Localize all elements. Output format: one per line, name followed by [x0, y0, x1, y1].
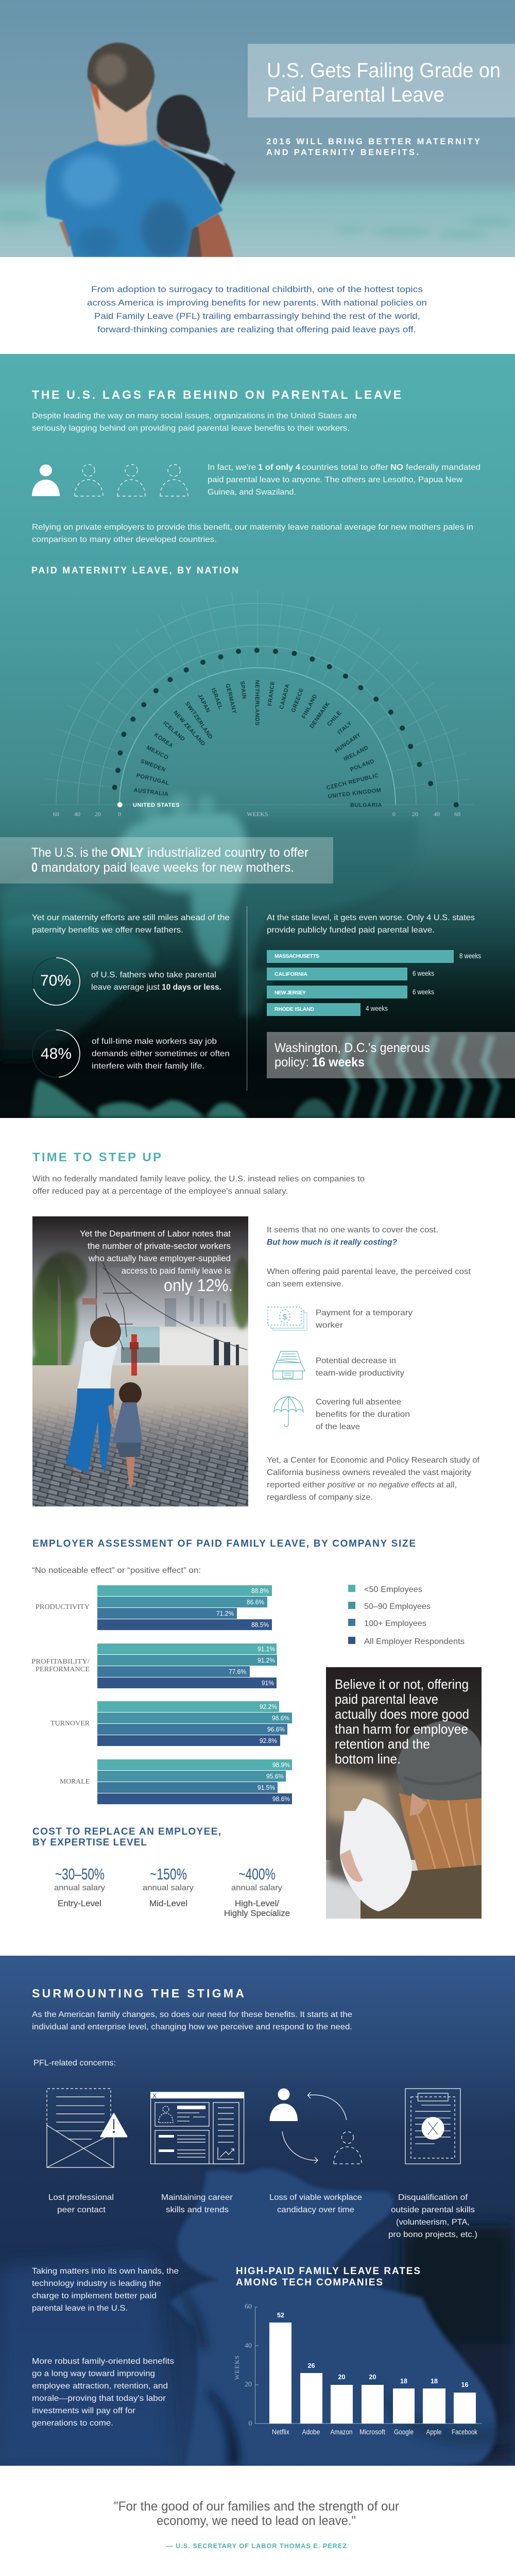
- callout: US is the only country: 0: [31, 860, 38, 875]
- bar group: profitability: [31, 1643, 277, 1688]
- bar chart: state paid leave: [267, 950, 481, 1016]
- text: 1 of only 4 countries: 1 of only 4: [258, 463, 300, 472]
- heading: cost to replace: BY EXPERTISE LEVEL: [32, 1837, 147, 1848]
- text: payment for temporary worker: Payment for a temporary: [316, 1309, 413, 1317]
- panel background: teal section with baby feet photo: [0, 354, 515, 1118]
- bar group: productivity: PRODUCTIVITY: [36, 1603, 90, 1611]
- text: covering absentee benefits: benefits for the duration: [316, 1410, 410, 1419]
- text: maternity ahead of paternity: [32, 913, 230, 935]
- callout: US is the only country: [0, 837, 333, 884]
- caption: lost professional peer contact: Lost professional: [48, 2193, 114, 2202]
- icon: resume window: X: [152, 2092, 157, 2099]
- bar group: turnover: 96.6%: [267, 1725, 285, 1733]
- quote: [114, 2499, 399, 2528]
- text: productivity decrease: team-wide productivity: [316, 1369, 404, 1378]
- callout: Washington DC: Washington, D.C.'s generous: [274, 1041, 430, 1055]
- stat: high-level: annual salary: [231, 1884, 282, 1892]
- stat: 48%: demands either sometimes or often: [92, 1049, 230, 1058]
- bar chart: tech company leave: 52: [277, 2311, 284, 2319]
- paragraph: family-oriented benefits: generations to come.: [32, 2419, 113, 2428]
- icon: money: [268, 1307, 307, 1330]
- bar chart: state paid leave: 4 weeks: [366, 1004, 388, 1012]
- bar group: morale: 98.9%: [272, 1761, 290, 1769]
- stat: 70%: leave average just: [91, 983, 160, 992]
- radial chart: paid maternity leave by nation: FRANCE: [267, 681, 276, 706]
- bar chart: tech company leave: WEEKS: [233, 2355, 241, 2380]
- radial chart: paid maternity leave by nation: CHILE: [326, 710, 343, 727]
- text: maternity ahead of paternity: paternity benefits we offer new fathers.: [32, 926, 183, 935]
- paragraph: CEPR study: positive: [327, 1481, 355, 1489]
- stat: 70%: 10 days or less.: [162, 983, 221, 992]
- heading: employer assessment: EMPLOYER ASSESSMENT OF PAID FAMILY LEAVE, BY COMPANY SIZE: [32, 1538, 416, 1549]
- bar chart: tech company leave: Netflix: [272, 2428, 289, 2436]
- callout: US is the only country: mandatory paid leave weeks for new mothers.: [41, 860, 294, 875]
- radial chart: paid maternity leave by nation: SWEDEN: [140, 758, 166, 773]
- bar chart: tech company leave: Google: [394, 2428, 414, 2436]
- quote: economy, we need to lead on leave.": [157, 2514, 356, 2528]
- bar group: profitability: PERFORMANCE: [36, 1665, 90, 1673]
- bar chart: tech company leave: 0: [248, 2420, 252, 2428]
- radial chart: paid maternity leave by nation: SWITZERLAND: [184, 701, 214, 740]
- text: payment for temporary worker: [315, 1309, 413, 1330]
- radial chart: paid maternity leave by nation: UNITED KINGDOM: [328, 787, 382, 800]
- text: state level: provide publicly funded paid parental leave.: [267, 926, 435, 935]
- caption: loss of candidacy: Loss of viable workplace: [269, 2193, 362, 2202]
- radial chart: paid maternity leave by nation: BULGARIA: [350, 802, 382, 808]
- caption: disqualification: [388, 2193, 477, 2239]
- stat: 70%: [32, 958, 221, 1005]
- stat: mid-level: annual salary: [143, 1884, 194, 1892]
- stat: 70%: of U.S. fathers who take parental: [91, 971, 216, 979]
- radial chart: paid maternity leave by nation: 0: [118, 810, 121, 818]
- paragraph: American family changes: individual and enterprise level, changing how we perceive and respond to the need.: [32, 2023, 352, 2031]
- stat: 48%: interfere with their family life.: [92, 1062, 204, 1071]
- radial chart: paid maternity leave by nation: 60: [454, 810, 460, 818]
- heading: cost to replace: COST TO REPLACE AN EMPLOYEE,: [32, 1826, 221, 1837]
- quote: "For the good of our families and the strength of our: [114, 2499, 399, 2514]
- caption: maintaining career skills: [161, 2193, 233, 2214]
- caption: disqualification: outside parental skills: [391, 2206, 475, 2214]
- paragraph: no federal policy: With no federally mandated family leave policy, the U.S. instead relies on companies to: [32, 1175, 365, 1183]
- radial chart: paid maternity leave by nation: NETHERLANDS: [254, 680, 260, 726]
- radial chart: paid maternity leave by nation: JAPAN: [196, 693, 211, 714]
- intro paragraph: forward-thinking companies are realizing that offering paid leave pays off.: [97, 325, 416, 334]
- bar group: profitability: 91.2%: [258, 1656, 275, 1664]
- legend: All Employer Respondents: [364, 1637, 465, 1646]
- text: cover the cost: [267, 1226, 438, 1247]
- caption: maintaining career skills: skills and trends: [166, 2206, 229, 2214]
- heading: THE U.S. LAGS FAR BEHIND ON PARENTAL LEAVE: [32, 388, 401, 401]
- photo panel: mother with baby: Believe it or not, offering: [335, 1676, 469, 1692]
- radial chart: paid maternity leave by nation: NEW ZEALAND: [172, 710, 207, 747]
- paragraph: family-oriented benefits: investments will pay off for: [32, 2406, 136, 2415]
- paragraph: CEPR study: no negative effects: [368, 1481, 435, 1489]
- bar group: morale: [60, 1759, 292, 1804]
- caption: loss of candidacy: [269, 2193, 362, 2214]
- text: cover the cost: It seems that no one wants to cover the cost.: [267, 1226, 438, 1234]
- callout: US is the only country: ONLY: [111, 845, 144, 860]
- radial chart: paid maternity leave by nation: GERMANY: [224, 683, 237, 715]
- paragraph: family-oriented benefits: More robust family-oriented benefits: [32, 2357, 174, 2366]
- callout: Washington DC: [267, 1032, 515, 1078]
- callout: Washington DC: policy:: [274, 1055, 309, 1070]
- lead paragraph: Despite leading the way on many social issues, organizations in the United States are: [32, 412, 357, 420]
- divider line: [247, 906, 248, 1091]
- text: 1 of only 4 countries: federally mandated: [406, 463, 480, 472]
- photo panel: mother and child on cobblestone street: Yet the Department of Labor notes that: [80, 1229, 231, 1239]
- bar group: turnover: [50, 1701, 292, 1746]
- text: relying on private employers: [32, 523, 473, 544]
- paragraph: CEPR study: Yet, a Center for Economic and Policy Research study of: [267, 1456, 480, 1465]
- bar chart: tech company leave: 16: [461, 2381, 469, 2388]
- paragraph: family-oriented benefits: go a long way toward improving: [32, 2369, 155, 2378]
- legend: 50–90 Employees: [364, 1602, 431, 1611]
- bar chart: tech company leave: Adobe: [302, 2428, 320, 2436]
- icon: disqualified document: [405, 2089, 460, 2164]
- bar chart: tech company leave: Microsoft: [359, 2428, 385, 2436]
- radial chart: paid maternity leave by nation: POLAND: [349, 758, 375, 773]
- bar chart: tech company leave: 18: [400, 2377, 407, 2385]
- photo panel: mother and child on cobblestone street: access to paid family leave is: [122, 1266, 231, 1276]
- paragraph: American family changes: [32, 2010, 352, 2031]
- text: PFL-related concerns: PFL-related concerns:: [33, 2059, 116, 2067]
- cost stats by expertise level: [54, 1865, 290, 1918]
- text: state level: At the state level, it gets even worse. Only 4 U.S. states: [267, 913, 475, 922]
- radial chart: paid maternity leave by nation: FINLAND: [301, 693, 319, 720]
- callout: Washington DC: 16 weeks: [312, 1055, 365, 1070]
- paragraph: family-oriented benefits: [32, 2357, 174, 2428]
- radial chart: paid maternity leave by nation: 40: [74, 810, 80, 818]
- paragraph: CEPR study: at all,: [437, 1481, 457, 1489]
- radial chart: paid maternity leave by nation: HUNGARY: [334, 732, 362, 754]
- radial chart: paid maternity leave by nation: WEEKS: [247, 810, 268, 818]
- bar group: profitability: 91%: [262, 1679, 274, 1687]
- icon: money: $: [283, 1313, 287, 1321]
- heading: time to step up: TIME TO STEP UP: [32, 1150, 161, 1164]
- text: covering absentee benefits: Covering full absentee: [316, 1398, 401, 1406]
- text: 1 of only 4 countries: Guinea, and Swaziland.: [208, 488, 296, 497]
- text: perceived cost: When offering paid parental leave, the perceived cost: [267, 1267, 471, 1276]
- photo panel: mother with baby: actually does more good: [335, 1706, 469, 1722]
- text: 1 of only 4 countries: paid parental leave to anyone. The others are Lesotho, Papua New: [208, 476, 462, 484]
- radial chart: paid maternity leave by nation: KOREA: [153, 732, 174, 749]
- radial chart: paid maternity leave by nation: UNITED STATES: [133, 802, 180, 808]
- bar group: productivity: 88.8%: [251, 1587, 269, 1595]
- radial chart: paid maternity leave by nation: GREECE: [290, 687, 305, 713]
- icon: envelope with warning: [47, 2089, 127, 2167]
- bar chart: state paid leave: 8 weeks: [459, 952, 481, 960]
- chart heading: PAID MATERNITY LEAVE, BY NATION: [31, 565, 238, 575]
- bar group: productivity: [36, 1585, 272, 1630]
- stat: entry-level: Entry-Level: [58, 1899, 101, 1908]
- radial chart: paid maternity leave by nation: IRELAND: [343, 744, 370, 762]
- bar group: productivity: 71.2%: [216, 1609, 234, 1617]
- bar group: profitability: PROFITABILITY/: [31, 1657, 90, 1665]
- stat: entry-level: ~30–50%: [55, 1865, 105, 1883]
- bar group: morale: 95.6%: [266, 1772, 284, 1780]
- title box: Paid Parental Leave: [267, 83, 444, 106]
- radial chart: paid maternity leave by nation: 0: [392, 810, 396, 818]
- bar chart: state paid leave: 6 weeks: [413, 969, 434, 977]
- photo panel: mother with baby: paid parental leave: [335, 1691, 438, 1707]
- legend: [348, 1585, 465, 1646]
- stat: high-level: ~400%: [238, 1865, 276, 1883]
- caption: lost professional peer contact: [48, 2193, 114, 2214]
- heading: high-paid family leave rates: AMONG TECH COMPANIES: [236, 2277, 383, 2288]
- photo panel: mother with baby: bottom line.: [335, 1751, 401, 1767]
- bar group: profitability: 91.1%: [258, 1645, 275, 1653]
- stat: 48%: [32, 1030, 230, 1077]
- text: cover the cost: But how much is it really costing?: [267, 1238, 397, 1247]
- bar chart: state paid leave: 6 weeks: [413, 988, 434, 996]
- bar group: morale: MORALE: [60, 1777, 90, 1785]
- callout: US is the only country: industrialized country to offer: [147, 845, 308, 860]
- caption: loss of candidacy: candidacy over time: [277, 2206, 354, 2214]
- text: relying on private employers: Relying on private employers to provide this benefit, our maternity leave national average for new mothers pales in: [32, 523, 473, 532]
- bar chart: employer assessment: [31, 1585, 292, 1804]
- paragraph: CEPR study: regardless of company size.: [267, 1493, 373, 1502]
- text: 1 of only 4 countries: [208, 463, 480, 497]
- subtitle: 2016 WILL BRING BETTER MATERNITY: [266, 137, 480, 146]
- bar group: turnover: 98.6%: [272, 1714, 289, 1722]
- radial chart: paid maternity leave by nation: DENMARK: [308, 701, 331, 730]
- icon: inbox with stacked papers: [272, 1351, 305, 1379]
- paragraph: technology industry: Taking matters into its own hands, the: [32, 2267, 179, 2276]
- heading: surmounting the stigma: SURMOUNTING THE STIGMA: [32, 1987, 244, 2000]
- callout: US is the only country: The U.S. is the: [31, 845, 108, 860]
- heading: high-paid family leave rates: [236, 2266, 420, 2288]
- photo panel: mother and child on cobblestone street: who actually have employer-supplied: [88, 1253, 231, 1263]
- paragraph: family-oriented benefits: employee attraction, retention, and: [32, 2382, 168, 2391]
- stat: high-level: [224, 1865, 290, 1918]
- caption: disqualification: Disqualification of: [398, 2193, 468, 2202]
- photo panel: mother with baby: [326, 1667, 482, 1919]
- bar group: productivity: 86.6%: [247, 1598, 264, 1606]
- paragraph: technology industry: [32, 2267, 179, 2313]
- text: 1 of only 4 countries: countries total to offer: [302, 463, 389, 472]
- text: productivity decrease: Potential decrease in: [316, 1357, 396, 1365]
- radial chart: paid maternity leave by nation: ISRAEL: [210, 687, 224, 710]
- radial chart: paid maternity leave by nation: CZECH REPUBLIC: [326, 772, 380, 791]
- bar group: turnover: 92.2%: [260, 1703, 277, 1710]
- text: productivity decrease: [316, 1357, 404, 1378]
- bar chart: tech company leave: Facebook: [452, 2428, 478, 2436]
- subtitle: AND PATERNITY BENEFITS.: [266, 148, 419, 157]
- bar chart: tech company leave: 18: [431, 2377, 438, 2385]
- text: 1 of only 4 countries: NO: [390, 463, 403, 472]
- icon: umbrella: [274, 1397, 303, 1427]
- stat: mid-level: Mid-Level: [149, 1899, 187, 1908]
- subtitle: [266, 137, 480, 157]
- radial chart: paid maternity leave by nation: SPAIN: [239, 681, 247, 700]
- caption: disqualification: pro bono projects, etc.): [388, 2230, 477, 2239]
- title box: [248, 44, 515, 117]
- bar chart: state paid leave: MASSACHUSETTS: [274, 953, 319, 959]
- stat: mid-level: ~150%: [150, 1865, 187, 1883]
- paragraph: technology industry: charge to implement better paid: [32, 2292, 157, 2300]
- bar group: turnover: TURNOVER: [50, 1719, 90, 1727]
- lead paragraph: [32, 412, 357, 433]
- text: relying on private employers: comparison to many other developed countries.: [32, 535, 217, 544]
- legend: 100+ Employees: [364, 1619, 426, 1628]
- text: covering absentee benefits: of the leave: [316, 1422, 360, 1431]
- stat: high-level: Highly Specialize: [224, 1908, 290, 1918]
- paragraph: no federal policy: offer reduced pay at a percentage of the employee's annual salary.: [32, 1187, 288, 1196]
- bar chart: state paid leave: RHODE ISLAND: [274, 1006, 314, 1012]
- radial chart: paid maternity leave by nation: PORTUGAL: [135, 772, 170, 787]
- text: 1 of only 4 countries: In fact, we're: [208, 463, 256, 472]
- bar chart: state paid leave: CALIFORNIA: [274, 971, 307, 977]
- radial chart: paid maternity leave by nation: MEXICO: [145, 744, 169, 761]
- paragraph: no federal policy: [32, 1175, 365, 1196]
- intro paragraph: [87, 284, 427, 334]
- bar chart: tech company leave: 40: [245, 2342, 252, 2350]
- intro paragraph: across America is improving benefits for new parents. With national policies on: [87, 298, 427, 308]
- stat: entry-level: [54, 1865, 105, 1908]
- photo panel: mother with baby: retention and the: [335, 1736, 430, 1752]
- bar chart: state paid leave: NEW JERSEY: [274, 990, 306, 996]
- icon: one filled person and three dashed persons: [32, 465, 188, 496]
- bar chart: tech company leave: 26: [308, 2362, 315, 2369]
- photo panel: mother and child on cobblestone street: only 12%.: [164, 1276, 233, 1295]
- stat: entry-level: annual salary: [54, 1884, 105, 1892]
- quote attribution: — U.S. SECRETARY OF LABOR THOMAS E. PEREZ: [166, 2543, 347, 2550]
- stat: mid-level: [143, 1865, 194, 1908]
- text: payment for temporary worker: worker: [315, 1321, 344, 1330]
- paragraph: CEPR study: or: [357, 1481, 365, 1489]
- bar chart: tech company leave: 20: [245, 2381, 252, 2388]
- stat: 48%: of full-time male workers say job: [92, 1037, 217, 1046]
- bar chart: tech company leave: Amazon: [331, 2428, 352, 2436]
- bar group: morale: 91.5%: [258, 1784, 275, 1791]
- radial chart: paid maternity leave by nation: 40: [434, 810, 440, 818]
- caption: lost professional peer contact: peer contact: [57, 2206, 106, 2214]
- paragraph: CEPR study: reported either: [267, 1481, 325, 1489]
- heading: cost to replace: [32, 1826, 221, 1848]
- bar chart: tech company leave: 20: [338, 2373, 345, 2381]
- paragraph: family-oriented benefits: morale—proving that today's labor: [32, 2394, 166, 2403]
- bar chart: tech company leave: 60: [245, 2303, 252, 2311]
- radial chart: paid maternity leave by nation: 20: [95, 810, 101, 818]
- bar group: turnover: 92.8%: [260, 1737, 277, 1744]
- radial chart: paid maternity leave by nation: ITALY: [337, 720, 353, 736]
- paragraph: American family changes: As the American family changes, so does our need for these benefits. It starts at the: [32, 2010, 352, 2019]
- radial chart: paid maternity leave by nation: [41, 590, 474, 818]
- icon: resume window: [151, 2092, 244, 2164]
- bar group: morale: 98.6%: [272, 1795, 290, 1803]
- caption: maintaining career skills: Maintaining career: [161, 2193, 233, 2202]
- photo panel: mother and child on cobblestone street: [30, 1216, 252, 1510]
- stat: 48%: 48%: [41, 1045, 72, 1062]
- intro paragraph: From adoption to surrogacy to traditional childbirth, one of the hottest topics: [91, 284, 423, 294]
- stat: high-level: High-Level/: [235, 1899, 279, 1908]
- bar group: productivity: 88.5%: [251, 1621, 269, 1629]
- lead paragraph: seriously lagging behind on providing paid parental leave benefits to their workers.: [32, 424, 350, 433]
- photo panel: mother with baby: than harm for employee: [335, 1721, 468, 1737]
- radial chart: paid maternity leave by nation: CANADA: [279, 683, 291, 710]
- text: covering absentee benefits: [316, 1398, 410, 1431]
- bar chart: tech company leave: [233, 2303, 482, 2436]
- radial chart: paid maternity leave by nation: 20: [412, 810, 418, 818]
- intro paragraph: Paid Family Leave (PFL) trailing embarrassingly behind the rest of the world,: [94, 311, 420, 321]
- text: state level: [267, 913, 475, 935]
- icon: person swap with arrows: [270, 2089, 362, 2164]
- stat: 70%: 70%: [40, 972, 71, 989]
- radial chart: paid maternity leave by nation: ICELAND: [162, 720, 186, 743]
- paragraph: CEPR study: [267, 1456, 480, 1502]
- radial chart: paid maternity leave by nation: AUSTRALIA: [133, 787, 169, 798]
- radial chart: paid maternity leave by nation: 60: [53, 810, 59, 818]
- photo panel: mother and child on cobblestone street: the number of private-sector workers: [88, 1241, 231, 1251]
- paragraph: technology industry: parental leave in the U.S.: [32, 2304, 128, 2313]
- bar group: profitability: 77.6%: [229, 1668, 246, 1675]
- caption: disqualification: (volunteerism, PTA,: [396, 2218, 470, 2227]
- bar chart: tech company leave: 20: [369, 2373, 376, 2381]
- text: perceived cost: [267, 1267, 471, 1289]
- text: maternity ahead of paternity: Yet our maternity efforts are still miles ahead of the: [32, 913, 230, 922]
- bar chart: tech company leave: Apple: [426, 2428, 442, 2436]
- paragraph: CEPR study: California business owners revealed the vast majority: [267, 1468, 471, 1477]
- chart subtitle: “No noticeable effect” or “positive effect” on:: [32, 1566, 201, 1575]
- panel background: navy section with baby hand photo: [0, 1956, 515, 2466]
- title box: U.S. Gets Failing Grade on: [267, 59, 501, 82]
- heading: high-paid family leave rates: HIGH-PAID FAMILY LEAVE RATES: [236, 2266, 420, 2277]
- hero photo: father carrying child at the sea: [0, 0, 515, 258]
- text: perceived cost: can seem extensive.: [267, 1280, 344, 1289]
- paragraph: technology industry: technology industry is leading the: [32, 2279, 161, 2288]
- legend: <50 Employees: [364, 1585, 422, 1594]
